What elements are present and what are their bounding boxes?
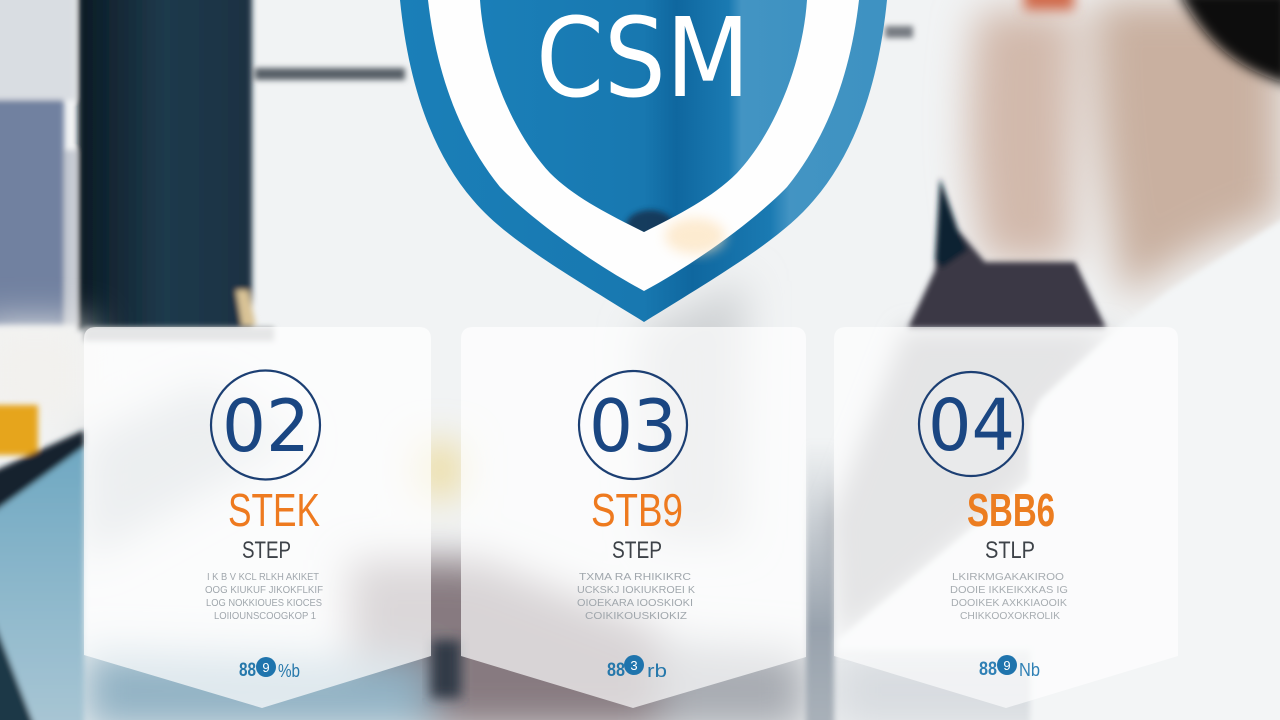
icon: small logo 04: Nb	[1019, 660, 1040, 680]
description 02: LOG NOKKIOUES KIOCES	[206, 598, 322, 609]
step label 04: STLP	[985, 537, 1035, 564]
description 04: DOOIKEK AXKKIAOOIK	[951, 598, 1067, 609]
panel: step 04	[834, 327, 1178, 708]
description 03	[577, 572, 695, 622]
orange heading 04: SBB6	[967, 484, 1055, 536]
panel 02 card	[84, 327, 431, 708]
step label 02: STEP	[242, 537, 291, 564]
shield white band	[428, 0, 859, 291]
description 03: UCKSKJ IOKIUKROEI K	[577, 585, 695, 596]
description 04: DOOIE IKKEIKXKAS IG	[950, 585, 1068, 596]
icon: small logo 03: 3	[630, 658, 638, 673]
number badge 03: 03	[589, 384, 677, 468]
panel: step 02	[84, 327, 431, 708]
number badge 02: 02	[222, 384, 310, 468]
icon: small logo 02: %b	[278, 661, 300, 681]
icon: small logo 04: 88	[979, 659, 997, 680]
description 04: CHIKKOOXOKROLIK	[960, 611, 1060, 622]
icon: small logo 03: 88	[607, 660, 625, 681]
description 02: OOG KIUKUF JIKOKFLKIF	[205, 585, 323, 596]
shield tip shadow	[624, 206, 674, 232]
orange heading 02: STEK	[228, 484, 320, 536]
panel: step 03	[461, 327, 806, 708]
description 02: LOIIOUNSCOOGKOP 1	[214, 611, 316, 622]
icon: small logo 03: rb	[647, 661, 667, 681]
panel 04 card	[834, 327, 1178, 708]
icon: small logo 02	[239, 657, 300, 681]
icon: small logo 02: 88	[239, 660, 256, 681]
number badge 03	[579, 371, 687, 479]
shield white band warm tint	[665, 218, 725, 254]
icon: small logo 02: 9	[262, 660, 270, 675]
description 03: TXMA RA RHIKIKRC	[579, 572, 691, 583]
description 02: I K B V KCL RLKH AKIKET	[207, 572, 319, 583]
number badge 02	[211, 370, 320, 480]
step label 03: STEP	[612, 537, 662, 564]
icon: small logo 04: 9	[1003, 658, 1011, 673]
shield logo	[400, 0, 887, 322]
orange heading 03: STB9	[591, 484, 683, 536]
description 04: LKIRKMGAKAKIROO	[952, 572, 1064, 583]
number badge 04	[919, 372, 1023, 476]
icon: small logo 03	[607, 655, 667, 681]
shield outer blue border	[400, 0, 887, 322]
description 04	[950, 572, 1068, 622]
number badge 04: 04	[928, 384, 1015, 467]
description 03: OIOEKARA IOOSKIOKI	[577, 598, 693, 609]
shield inner blue field	[480, 0, 807, 232]
description 02	[205, 572, 323, 622]
panel 03 card	[461, 327, 806, 708]
description 03: COIKIKOUSKIOKIZ	[585, 611, 687, 622]
icon: small logo 04	[979, 655, 1040, 680]
